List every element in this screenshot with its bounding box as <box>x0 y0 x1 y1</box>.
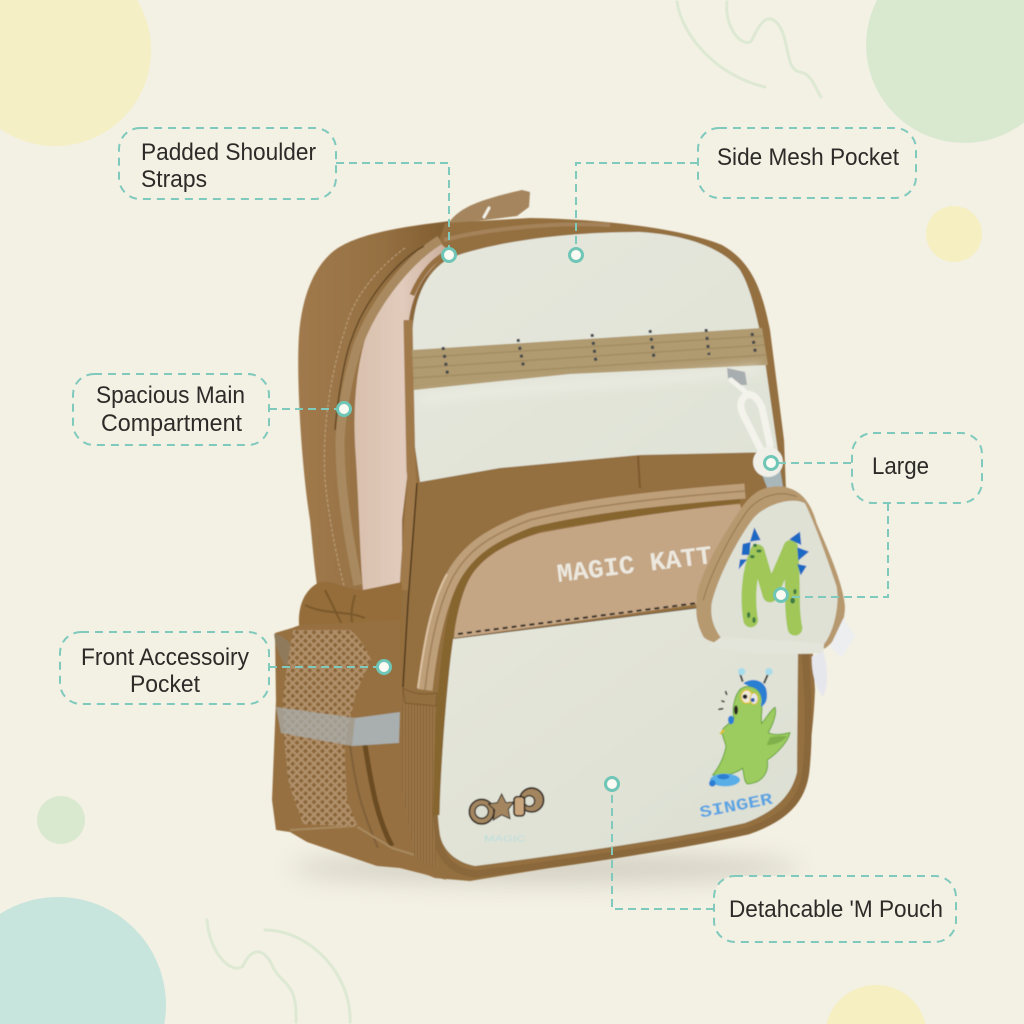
side pocket dark folds <box>365 745 392 846</box>
connector: side mesh pocket <box>576 163 698 255</box>
decorative circle: bottom left teal <box>0 897 166 1024</box>
lower white pocket <box>437 608 798 866</box>
connector: large <box>771 462 851 464</box>
marker dots <box>338 248 788 790</box>
front pocket zipper <box>418 491 745 690</box>
side tab <box>274 634 294 668</box>
decorative circle: small yellow <box>926 206 982 262</box>
pouch tags <box>830 618 855 657</box>
seam between panel and lower body <box>638 456 640 488</box>
detachable M pouch <box>696 486 855 697</box>
logo star: MAGIC <box>484 835 526 844</box>
callout: large: Large <box>872 453 929 480</box>
decorative circle: top right green <box>866 0 1024 143</box>
dark body seam <box>403 483 417 687</box>
tan pocket band <box>454 504 770 638</box>
top handle <box>448 190 530 224</box>
callout: detachable pouch: Detahcable 'M Pouch <box>729 896 943 923</box>
backpack illustration <box>272 190 855 881</box>
front ribbed side pocket <box>401 688 438 868</box>
decorative squiggles: top <box>677 2 821 97</box>
top white panel <box>412 232 778 482</box>
callout: large <box>852 433 982 503</box>
main compartment zipper <box>340 240 440 585</box>
decorative circle: small green <box>37 796 85 844</box>
reflective strip <box>352 712 400 746</box>
connector: spacious main compartment <box>269 408 344 410</box>
logo star <box>469 788 544 844</box>
connector: front accessory pocket <box>269 666 384 668</box>
keychain strap <box>761 468 783 490</box>
lower pocket edge <box>433 650 808 874</box>
callout: padded shoulder straps: Straps <box>141 166 207 193</box>
lining seam <box>412 250 452 295</box>
callout: front accessory pocket <box>60 632 269 704</box>
dinosaur singer illustration <box>698 668 790 824</box>
strap stitches <box>443 329 756 377</box>
callout: detachable pouch <box>714 876 956 942</box>
keychain loop <box>753 447 783 477</box>
reflective strip behind mesh <box>276 707 356 746</box>
connector: large lower <box>781 503 888 597</box>
callout: side mesh pocket <box>698 128 916 198</box>
bag side panel <box>298 221 450 600</box>
decorative squiggles: bottom <box>207 920 350 1022</box>
callout: padded shoulder straps <box>119 128 336 199</box>
connector: detachable pouch <box>612 784 714 909</box>
callout: front accessory pocket: Front Accessoiry <box>81 644 249 671</box>
singer label: SINGER <box>698 791 774 824</box>
brand text: MAGIC KATT <box>555 541 714 590</box>
webbing strap <box>412 328 768 390</box>
decorative circle: bottom right yellow <box>826 985 926 1024</box>
callout: spacious main compartment: Spacious Main <box>96 382 245 409</box>
side mesh pocket <box>283 630 371 827</box>
decorative circle: top left yellow <box>0 0 151 146</box>
callout: spacious main compartment: Compartment <box>101 410 242 437</box>
letter M dinosaur <box>749 547 795 628</box>
front pocket inner rim <box>435 498 740 815</box>
ground shadow <box>290 853 800 883</box>
keychain white links <box>731 380 770 450</box>
callout: padded shoulder straps: Padded Shoulder <box>141 139 316 166</box>
connector: padded shoulder straps <box>336 163 449 255</box>
upper rim highlight <box>444 224 610 240</box>
pink inner lining <box>354 243 450 590</box>
callout: side mesh pocket: Side Mesh Pocket <box>717 144 899 171</box>
side pocket lower body <box>272 620 447 880</box>
callout: front accessory pocket: Pocket <box>130 671 200 698</box>
bag front body <box>390 218 815 881</box>
stitched line <box>458 603 698 634</box>
drawstring gathered top of side pocket <box>299 582 402 690</box>
keychain gray tag <box>727 368 747 385</box>
fold shadow on white panel <box>420 368 760 400</box>
pouch flap <box>708 637 824 654</box>
blue spikes <box>739 527 809 575</box>
callout: spacious main compartment <box>73 374 269 445</box>
